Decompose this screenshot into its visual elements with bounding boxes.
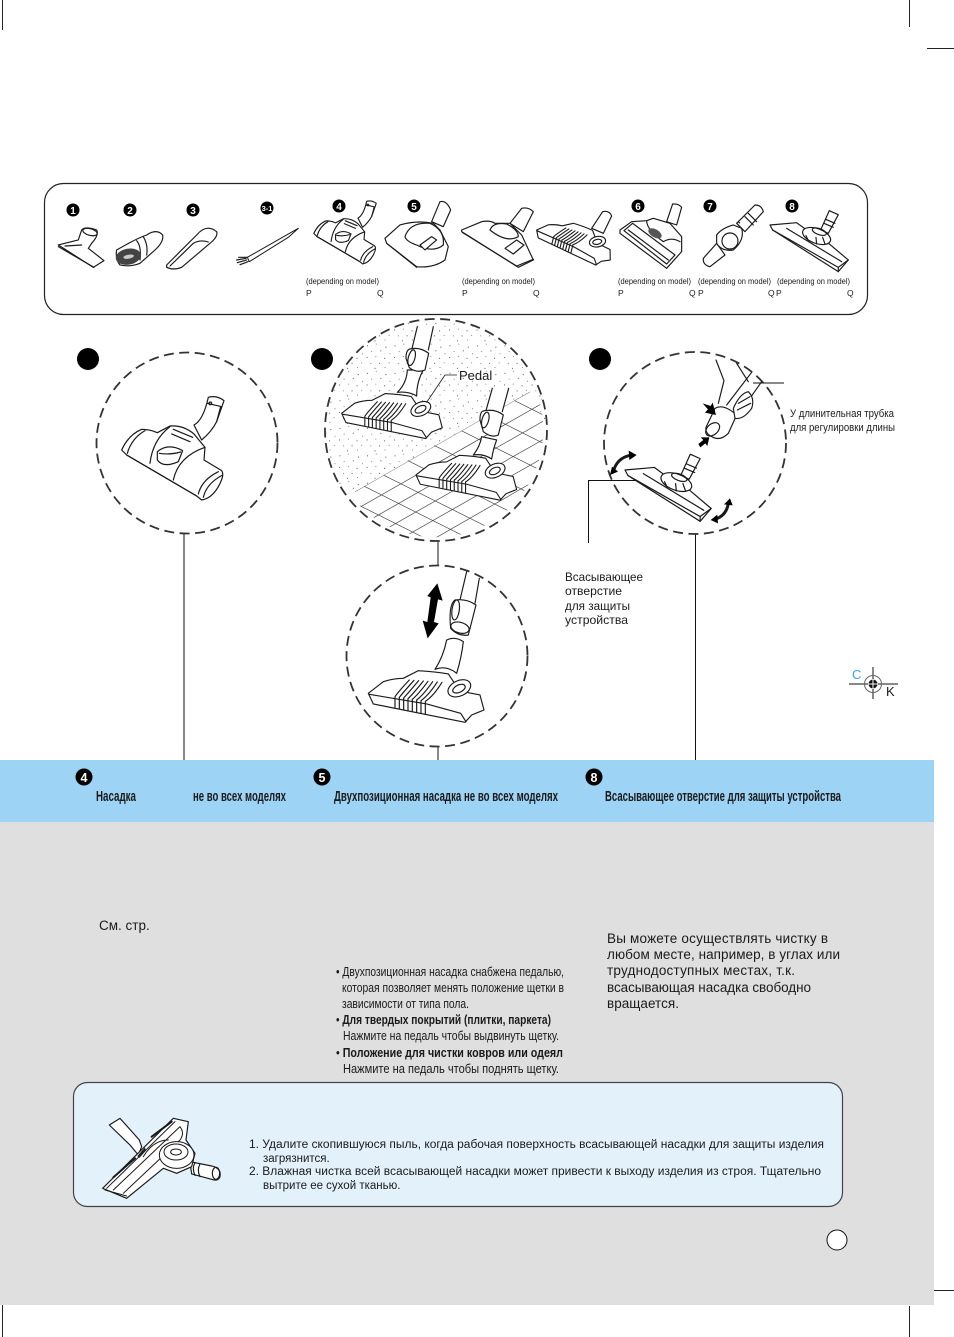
floor nozzle [625, 454, 711, 521]
text: suction opening description [607, 931, 840, 1011]
header: nozzle 5: 5 [319, 771, 326, 785]
icon: nozzle 5 second view [462, 208, 533, 267]
icon: nozzle 5 [385, 201, 451, 267]
header: nozzle 8: 8 [591, 771, 598, 785]
label: suction opening [565, 570, 643, 627]
registration mark [849, 667, 898, 699]
icon: nozzle 6 [620, 204, 682, 268]
note text: 1. Удалите скопившуюся пыль, когда рабочая поверхность всасывающей насадки для защиты изделия [249, 1139, 824, 1151]
model captions: P [306, 288, 312, 298]
icon: small brush [237, 228, 298, 265]
number badges: 2 [127, 206, 133, 217]
icon: upholstery tool [58, 227, 104, 267]
icon: dusting brush [114, 232, 163, 267]
hose [450, 572, 479, 635]
text: two-position nozzle notes: которая позволяет менять положение щетки в [342, 981, 564, 995]
header: nozzle 4: не во всех моделях [193, 788, 286, 805]
pedal leader [427, 375, 457, 402]
model captions: Q [377, 288, 384, 298]
number badges: 7 [707, 202, 713, 213]
tile floor [355, 392, 543, 538]
header: nozzle 4: 4 [81, 771, 88, 785]
label: telescopic tube [790, 408, 895, 434]
model captions: P [462, 288, 468, 298]
text: suction opening description: труднодоступных местах, т.к. [607, 963, 795, 978]
model captions: (depending on model) [462, 276, 535, 286]
number badges: 4 [336, 202, 342, 213]
note text: 2. Влажная чистка всей всасывающей насадки может привести к выходу изделия из строя. Тщательно [249, 1166, 821, 1178]
nozzle neck [435, 638, 463, 673]
number badges: 6 [635, 202, 641, 213]
text: two-position nozzle notes: Нажмите на педаль чтобы поднять щетку. [343, 1062, 559, 1076]
icon: nozzle 7 [703, 205, 763, 267]
note text: вытрите ее сухой тканью. [263, 1180, 400, 1192]
model captions: Q [847, 288, 854, 298]
icon: crevice tool [167, 228, 217, 269]
number badges: 3 [190, 206, 196, 217]
circle 2: pedal on carpet and hard floor [311, 318, 548, 542]
number badges: 5 [411, 202, 417, 213]
label: telescopic tube: У длинительная трубка [790, 408, 895, 420]
rotation arrows [610, 451, 733, 523]
model captions: Q [768, 288, 775, 298]
registration mark: C [852, 667, 861, 682]
text: two-position nozzle notes: • Положение для чистки ковров или одеял [336, 1046, 563, 1060]
label: Pedal: Pedal [459, 368, 492, 383]
hand and tube [703, 360, 762, 439]
text: suction opening description: всасывающая насадка свободно [607, 980, 811, 995]
arrow: up and down [423, 583, 443, 638]
model captions: (depending on model) [777, 276, 850, 286]
model captions: (depending on model) [306, 276, 379, 286]
model captions: P [698, 288, 704, 298]
nozzle on hard floor [416, 388, 517, 500]
page number circle [827, 1230, 847, 1250]
label: suction opening: для защиты [565, 599, 630, 613]
model captions: (depending on model) [698, 276, 771, 286]
connector lines [184, 383, 784, 760]
text: two-position nozzle notes [336, 965, 564, 1076]
model captions: (depending on model) [618, 276, 691, 286]
model captions: P [776, 288, 782, 298]
registration mark: K [886, 684, 895, 699]
icon: turbo nozzle small [314, 201, 376, 264]
text: two-position nozzle notes: • Для твердых покрытий (плитки, паркета) [336, 1013, 551, 1027]
note text: загрязнится. [263, 1153, 330, 1165]
model captions: Q [689, 288, 696, 298]
circle 1: turbo nozzle [77, 348, 278, 534]
header: nozzle 5 [314, 768, 558, 805]
text: two-position nozzle notes: зависимости от типа пола. [342, 997, 469, 1011]
nozzle [368, 671, 484, 722]
text: suction opening description: Вы можете осуществлять чистку в [607, 931, 828, 946]
model captions [306, 276, 854, 298]
icon: nozzle 8 [770, 211, 848, 272]
circle 3: floor nozzle with telescopic tube [589, 348, 895, 534]
header: nozzle 5: Двухпозиционная насадка не во всех моделях [334, 788, 558, 805]
number badges: 1 [70, 206, 76, 217]
text: suction opening description: вращается. [607, 996, 679, 1011]
label: suction opening: отверстие [565, 584, 622, 598]
text: suction opening description: любом месте, например, в углах или [607, 947, 840, 962]
nozzle on carpet [342, 327, 442, 439]
panel: note [74, 1082, 842, 1206]
model captions: Q [533, 288, 540, 298]
number badges: 3-1 [262, 204, 272, 213]
text: two-position nozzle notes: Нажмите на педаль чтобы выдвинуть щетку. [343, 1029, 559, 1043]
panel: accessories overview [44, 184, 868, 314]
press arrow [703, 403, 716, 415]
label: telescopic tube: для регулировки длины [790, 422, 895, 434]
illustration: turbo nozzle [122, 397, 224, 500]
label: suction opening: Всасывающее [565, 570, 643, 584]
header: nozzle 8 [586, 768, 841, 805]
header band [0, 760, 934, 822]
text: two-position nozzle notes: • Двухпозиционная насадка снабжена педалью, [336, 965, 564, 979]
carpet stipple [323, 318, 550, 495]
circle 4: pedal position change [346, 566, 528, 746]
label: suction opening: устройства [565, 613, 628, 627]
number badges [66, 200, 798, 217]
icon: nozzle underside with brush [103, 1118, 220, 1198]
header: nozzle 4 [76, 768, 286, 805]
model captions: P [618, 288, 624, 298]
header: nozzle 4: Насадка [96, 788, 136, 805]
text: see page: См. стр. [99, 918, 150, 933]
icon: nozzle 5 carpet view [532, 211, 617, 268]
note text [249, 1139, 824, 1192]
number badges: 8 [789, 202, 795, 213]
insert arrow [698, 437, 709, 447]
grey background [0, 822, 934, 1305]
